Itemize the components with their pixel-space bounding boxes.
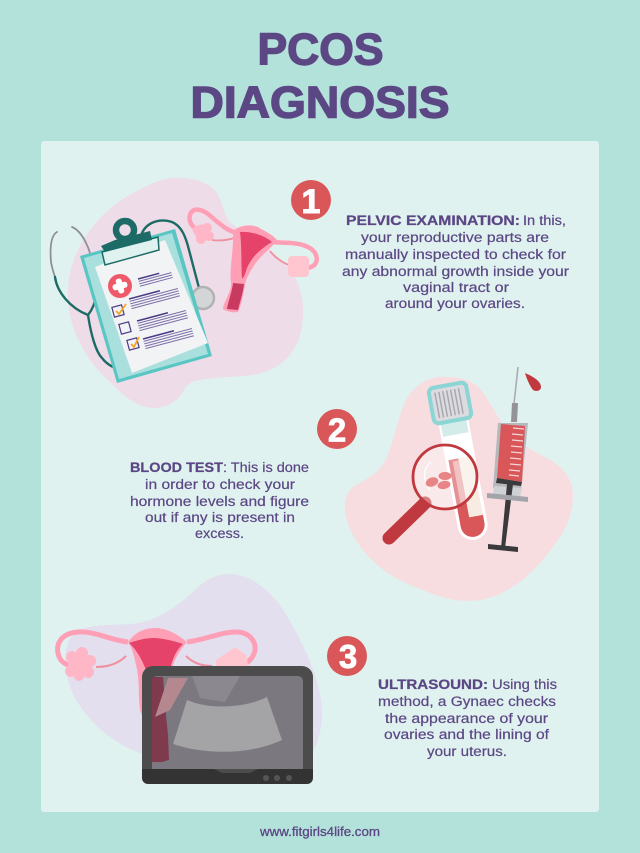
text: ultrasound: Using this	[492, 677, 557, 692]
text: blood test: BLOOD TEST	[130, 460, 224, 475]
icon: test tube	[426, 380, 496, 543]
text: ultrasound: method, a Gynaec checks	[378, 694, 556, 709]
footer url: www.fitgirls4life.com	[259, 824, 380, 839]
text: ultrasound: ovaries and the lining of	[384, 727, 549, 742]
text: blood test: in order to check your	[145, 477, 296, 492]
number badge 3: 3	[339, 638, 357, 675]
blob: lavender background	[66, 574, 322, 769]
text: pelvic examination: your reproductive parts are	[361, 230, 549, 245]
number badge 1	[291, 180, 331, 221]
panel: main card	[41, 141, 599, 812]
title: DIAGNOSIS	[190, 78, 450, 128]
blob: pink background	[68, 178, 303, 408]
text: ultrasound: your uterus.	[427, 744, 507, 759]
text: pelvic examination	[342, 213, 570, 311]
icon: blood drop	[525, 373, 541, 391]
icon: magnifying glass	[389, 445, 477, 538]
number badge 1: 1	[302, 183, 320, 221]
title: PCOS	[258, 26, 384, 74]
text: pelvic examination: PELVIC EXAMINATION:	[346, 213, 520, 228]
checklist lines	[129, 270, 194, 349]
section 1: pelvic examination illustration	[51, 178, 317, 408]
icon: medical cross	[108, 274, 132, 298]
checkboxes	[112, 304, 139, 350]
icon: syringe	[487, 367, 528, 552]
text: pelvic examination: In this,	[523, 213, 566, 228]
text: blood test: : This is done	[223, 460, 309, 475]
number badge 2	[317, 409, 357, 449]
title	[190, 26, 450, 128]
icon: uterus	[189, 210, 317, 312]
icon: stethoscope	[51, 220, 214, 367]
number badge 2: 2	[328, 412, 346, 448]
text: blood test: out if any is present in	[145, 510, 295, 525]
section 3: ultrasound illustration	[58, 574, 322, 784]
text: blood test	[130, 460, 309, 541]
icon: uterus	[58, 628, 255, 727]
text: blood test: hormone levels and figure	[130, 494, 309, 509]
text: blood test: excess.	[195, 526, 244, 541]
icon: ultrasound monitor	[142, 666, 313, 784]
text: pelvic examination: vaginal tract or	[403, 280, 510, 295]
text: pelvic examination: any abnormal growth inside your	[342, 264, 570, 279]
clip	[116, 221, 134, 239]
blob: light red background	[345, 377, 573, 601]
number badge 3	[327, 636, 367, 676]
icon: clipboard	[80, 221, 212, 383]
text: pelvic examination: manually inspected to check for	[345, 247, 567, 262]
text: ultrasound: the appearance of your	[385, 711, 549, 726]
text: ultrasound	[378, 677, 557, 759]
text: pelvic examination: around your ovaries.	[385, 296, 525, 311]
text: ultrasound: ULTRASOUND:	[378, 677, 488, 692]
section 2: blood test illustration	[345, 367, 573, 601]
